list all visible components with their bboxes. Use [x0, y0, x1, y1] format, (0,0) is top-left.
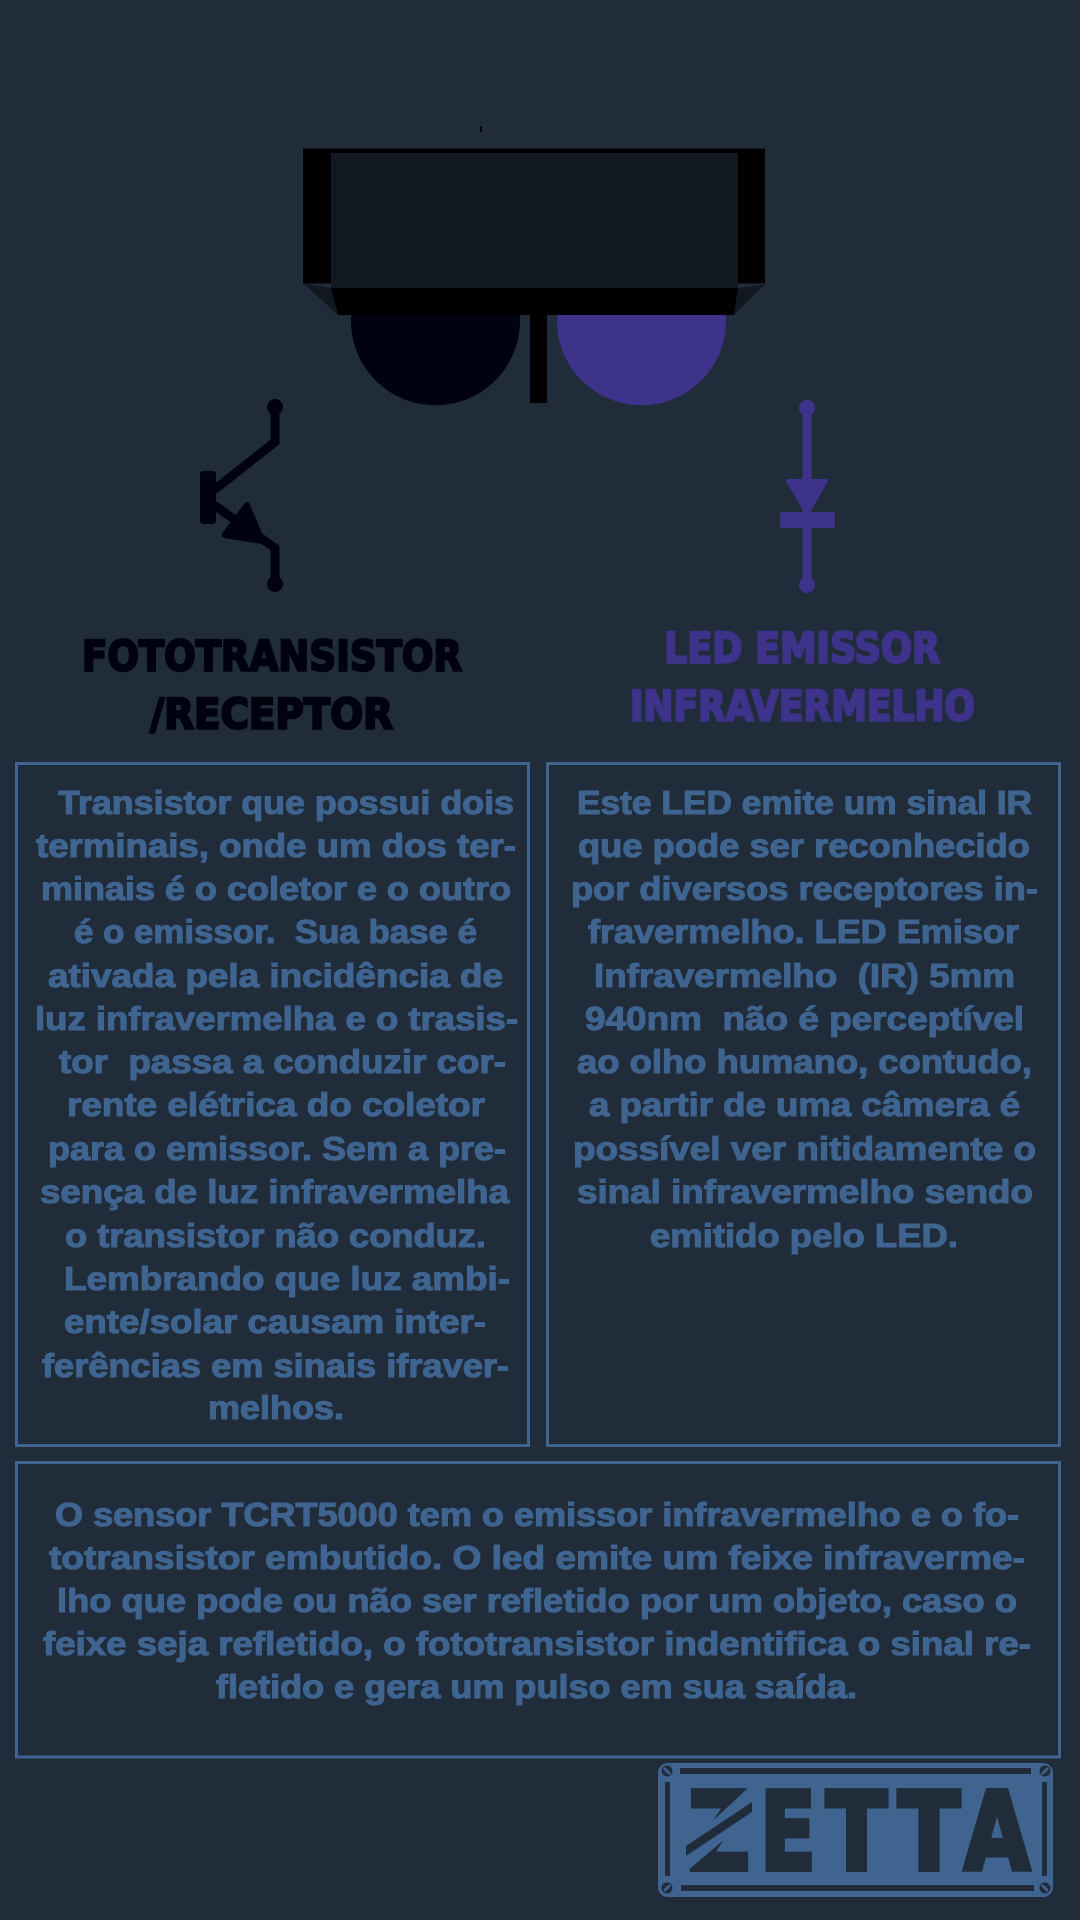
heading: LED emitter: LED EMISSOR [664, 624, 940, 672]
text block: phototransistor description: é o emissor. Sua base é [74, 913, 477, 950]
heading: phototransistor [82, 632, 462, 738]
text block: phototransistor description: o transistor não conduz. [65, 1217, 486, 1254]
text block: phototransistor description: ativada pela incidência de [48, 957, 503, 994]
text block: LED description [571, 784, 1038, 1254]
text block: phototransistor description: ferências em sinais ifraver- [42, 1347, 509, 1384]
panel: phototransistor description [16, 764, 528, 1446]
text block: LED description: possível ver nitidamente o [573, 1130, 1036, 1167]
text block: LED description: emitido pelo LED. [650, 1217, 958, 1254]
heading: LED emitter [630, 624, 975, 730]
illustration: TCRT5000 sensor [303, 126, 765, 405]
heading: LED emitter: INFRAVERMELHO [630, 682, 975, 730]
heading: phototransistor: /RECEPTOR [150, 690, 393, 738]
text block: sensor summary: feixe seja refletido, o fototransistor indentifica o sinal re- [43, 1625, 1031, 1662]
panel: sensor summary [16, 1462, 1060, 1757]
text block: sensor summary: lho que pode ou não ser refletido por um objeto, caso o [57, 1582, 1017, 1619]
logo wordmark: E [760, 1770, 816, 1896]
text block: sensor summary [43, 1496, 1031, 1705]
text block: phototransistor description: minais é o coletor e o outro [41, 870, 511, 907]
text block: sensor summary: O sensor TCRT5000 tem o emissor infravermelho e o fo- [55, 1496, 1019, 1533]
text block: phototransistor description: melhos. [208, 1389, 344, 1426]
icon: LED diode symbol [780, 400, 835, 593]
text block: LED description: Este LED emite um sinal IR [577, 784, 1032, 821]
text block: phototransistor description: ente/solar causam inter- [64, 1303, 486, 1340]
panel: LED description [548, 764, 1060, 1446]
text block: phototransistor description: tor passa a conduzir cor- [59, 1043, 506, 1080]
text block: phototransistor description: sença de luz infravermelha [40, 1173, 510, 1210]
text block: phototransistor description: luz infravermelha e o trasis- [35, 1000, 518, 1037]
logo wordmark: T [898, 1770, 960, 1896]
logo wordmark [688, 1770, 1030, 1896]
text block: LED description: fravermelho. LED Emisor [588, 913, 1019, 950]
text block: LED description: 940nm não é perceptível [585, 1000, 1024, 1037]
text block: LED description: a partir de uma câmera é [589, 1086, 1020, 1123]
logo wordmark: Z [688, 1770, 750, 1896]
text block: LED description: sinal infravermelho sendo [577, 1173, 1033, 1210]
text block: phototransistor description: Lembrando que luz ambi- [64, 1260, 510, 1297]
text block: sensor summary: fletido e gera um pulso em sua saída. [216, 1668, 857, 1705]
logo: ZETTA plate [658, 1763, 1053, 1897]
text block: phototransistor description: para o emissor. Sem a pre- [48, 1130, 506, 1167]
logo wordmark: A [964, 1770, 1030, 1896]
logo wordmark: T [826, 1770, 887, 1896]
text block: LED description: ao olho humano, contudo, [577, 1043, 1032, 1080]
text block: phototransistor description: rente elétrica do coletor [67, 1086, 485, 1123]
sensor phototransistor dome [351, 315, 520, 405]
heading: phototransistor: FOTOTRANSISTOR [82, 632, 462, 680]
sensor LED dome [557, 315, 726, 405]
icon: phototransistor symbol [200, 399, 283, 592]
text block: phototransistor description [35, 784, 518, 1426]
sensor centre pin [530, 315, 547, 403]
text block: LED description: Infravermelho (IR) 5mm [594, 957, 1015, 994]
text block: phototransistor description: terminais, onde um dos ter- [36, 827, 516, 864]
text block: LED description: por diversos receptores in- [571, 870, 1038, 907]
text block: sensor summary: totransistor embutido. O led emite um feixe infraverme- [49, 1539, 1025, 1576]
text block: phototransistor description: Transistor que possui dois [58, 784, 514, 821]
sensor body [303, 148, 765, 315]
text block: LED description: que pode ser reconhecido [578, 827, 1030, 864]
